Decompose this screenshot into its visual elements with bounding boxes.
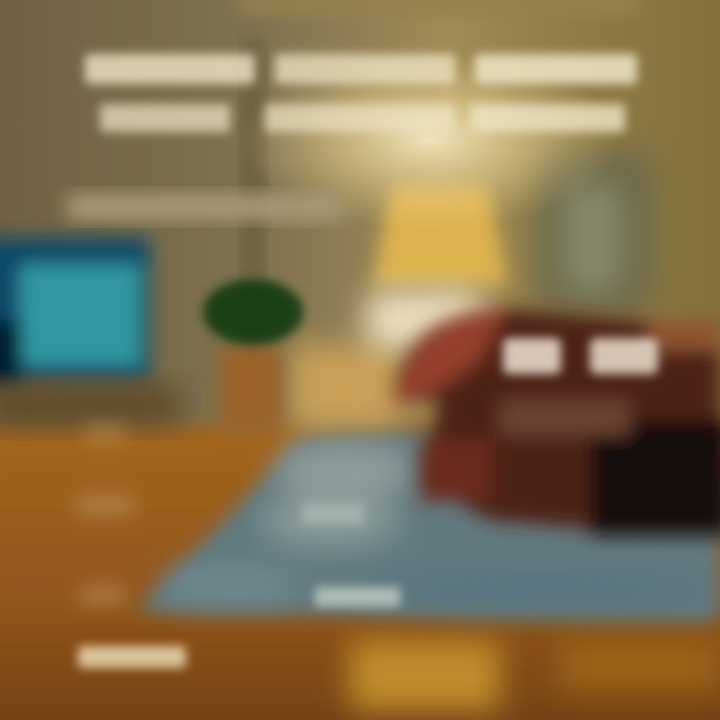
sunlit floor behind plant (290, 345, 400, 430)
rug labels (302, 503, 400, 607)
mirror on right wall (535, 150, 655, 315)
wall frame vertical post (243, 40, 263, 280)
rug (135, 430, 720, 622)
lamp shade (372, 185, 508, 285)
light glow behind heading (240, 50, 620, 230)
bottom label (78, 646, 186, 668)
rug texture (160, 440, 710, 608)
heading text block (85, 54, 637, 132)
white pillow and bed glow (365, 290, 485, 350)
floor (0, 425, 720, 720)
top ceiling band (240, 0, 640, 14)
TV screen (0, 238, 150, 385)
plant foliage (203, 279, 303, 345)
list text block (78, 425, 133, 605)
plant pot (220, 345, 282, 430)
sofa cushions text (503, 338, 658, 374)
sofa (395, 310, 720, 535)
subheading text block (68, 194, 343, 220)
TV stand shadow (0, 385, 180, 425)
floor reflection (350, 640, 720, 710)
wall background (0, 0, 720, 460)
